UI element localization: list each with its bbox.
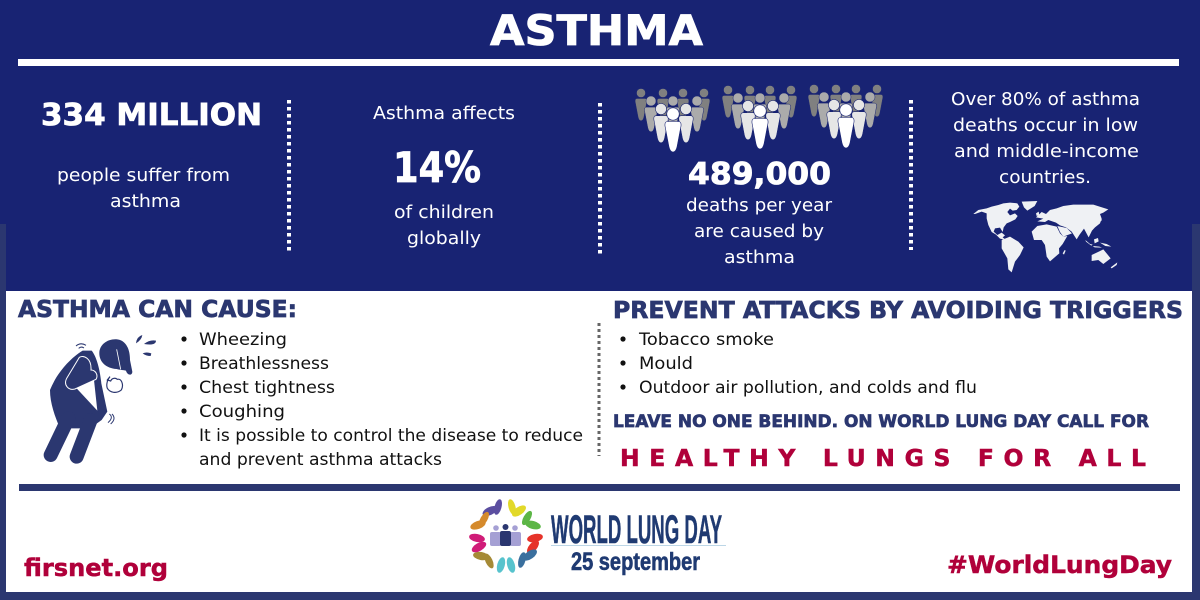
list: triggers: Mould — [639, 354, 693, 373]
logo: world lung day — [468, 498, 726, 576]
stat: 14% of children: Asthma affects — [373, 103, 515, 124]
stat: 14% of children: globally — [407, 228, 481, 249]
stat: 334 million — [41, 98, 262, 212]
list: symptoms: Wheezing — [199, 330, 287, 349]
stat: low and middle-income countries: deaths occur in low — [953, 115, 1138, 136]
stat: low and middle-income countries: countries. — [999, 167, 1091, 188]
stat: 489,000 deaths — [686, 157, 833, 268]
list: triggers: Tobacco smoke — [638, 330, 774, 349]
logo wordmark: 25 september — [571, 548, 700, 576]
icon: person coughing — [50, 335, 156, 457]
title: ASTHMA — [490, 6, 704, 55]
list: symptoms: and prevent asthma attacks — [199, 450, 442, 469]
stat: low and middle-income countries: and middle-income — [954, 141, 1139, 162]
stat: 489,000 deaths: deaths per year — [686, 195, 833, 216]
list: symptoms: Coughing — [199, 402, 285, 421]
stat: 14% of children: 14% — [393, 143, 481, 192]
stat: 489,000 deaths: asthma — [724, 247, 795, 268]
list: symptoms: It is possible to control the disease to reduce — [199, 426, 583, 445]
stat: 334 million: 334 MILLION — [41, 98, 262, 133]
list: symptoms: Breathlessness — [199, 354, 329, 373]
icon: groups of people — [635, 84, 883, 152]
stat: 14% of children: of children — [394, 202, 494, 223]
heading: asthma can cause: ASTHMA CAN CAUSE: — [18, 297, 297, 323]
text: WORLD LUNG DAY — [551, 508, 722, 552]
callout: healthy lungs for all: HEALTHY LUNGS FOR ALL — [620, 444, 1146, 472]
list: symptoms — [181, 330, 583, 469]
stat: low and middle-income countries — [951, 89, 1140, 188]
panel: lower white section — [6, 291, 1192, 592]
link: firsnet.org: firsnet.org — [24, 554, 168, 582]
heading: prevent attacks: PREVENT ATTACKS BY AVOIDING TRIGGERS — [613, 298, 1183, 324]
callout: leave no one behind: LEAVE NO ONE BEHIND. ON WORLD LUNG DAY CALL FOR — [613, 412, 1149, 432]
stat: 489,000 deaths: 489,000 — [688, 157, 831, 192]
list: symptoms: Chest tightness — [199, 378, 335, 397]
hashtag: WorldLungDay: #WorldLungDay — [947, 551, 1172, 579]
icon: ring of lungs — [468, 498, 544, 574]
stat: 489,000 deaths: are caused by — [694, 221, 824, 242]
stat: 334 million: people suffer from — [57, 165, 230, 186]
stat: 14% of children — [373, 103, 515, 249]
icon: world map — [973, 201, 1117, 272]
list: triggers: Outdoor air pollution, and colds and flu — [639, 378, 977, 397]
stat: 334 million: asthma — [110, 191, 181, 212]
list: triggers — [620, 330, 977, 397]
stat: low and middle-income countries: Over 80% of asthma — [951, 89, 1140, 110]
logo wordmark — [551, 508, 726, 576]
